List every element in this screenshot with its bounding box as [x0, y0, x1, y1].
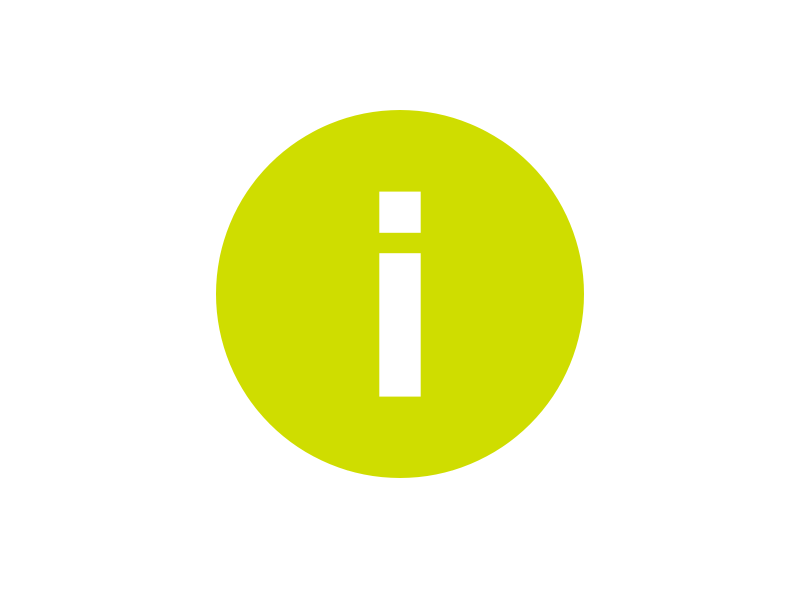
icon background: lime circle	[216, 110, 584, 478]
letter i: dot	[379, 192, 421, 233]
letter i: stem	[379, 253, 421, 397]
